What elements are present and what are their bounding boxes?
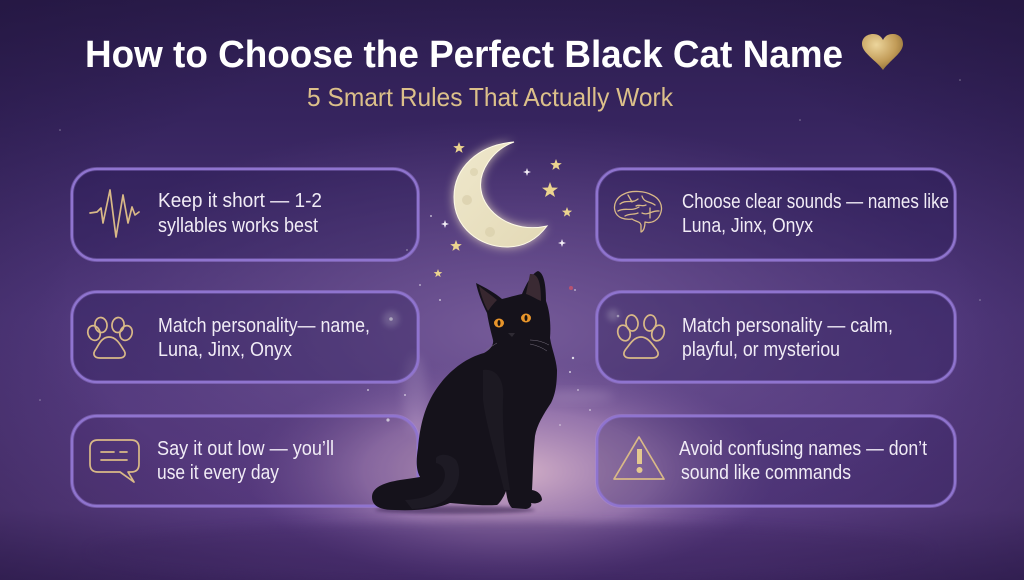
icon: brain: [614, 191, 662, 232]
moon: [454, 142, 547, 247]
subtitle: 5 Smart Rules That Actually Work: [307, 82, 674, 112]
icon: speech bubble: [90, 440, 139, 482]
panel: avoid confusing names: [597, 416, 955, 506]
icon: gold heart: [862, 34, 903, 70]
panel: keep it short: [72, 169, 418, 260]
text: second lines: use it every day: [157, 461, 280, 484]
title: How to Choose the Perfect Black Cat Name: [85, 34, 843, 76]
text: keep it short: Keep it short — 1-2: [158, 189, 322, 212]
black cat: [372, 271, 557, 514]
text: second lines: [157, 214, 851, 484]
text: say it out low: Say it out low — you’ll: [157, 437, 334, 460]
text: second lines: Luna, Jinx, Onyx: [158, 338, 293, 361]
text: second lines: playful, or mysteriou: [682, 338, 840, 361]
text: avoid confusing names: Avoid confusing names — don’t: [679, 437, 927, 460]
panel: match personality right: [597, 292, 955, 382]
text: choose clear sounds: Choose clear sounds — names like: [682, 190, 949, 213]
icon: paw: [86, 317, 134, 358]
panel: choose clear sounds: [597, 169, 955, 260]
text: second lines: sound like commands: [681, 461, 851, 484]
eyes: [486, 314, 549, 351]
icon: paw: [616, 314, 666, 358]
text: second lines: Luna, Jinx, Onyx: [682, 214, 814, 237]
text: second lines: syllables works best: [158, 214, 318, 237]
icon: warning triangle: [614, 437, 664, 479]
text: match personality name: Match personality— name,: [158, 314, 370, 337]
panel: say it out low: [72, 416, 418, 506]
text: match personality calm: Match personality — calm,: [682, 314, 893, 337]
panel: match personality left: [72, 292, 418, 382]
stars: [434, 142, 572, 277]
icon: sound wave: [90, 190, 139, 237]
